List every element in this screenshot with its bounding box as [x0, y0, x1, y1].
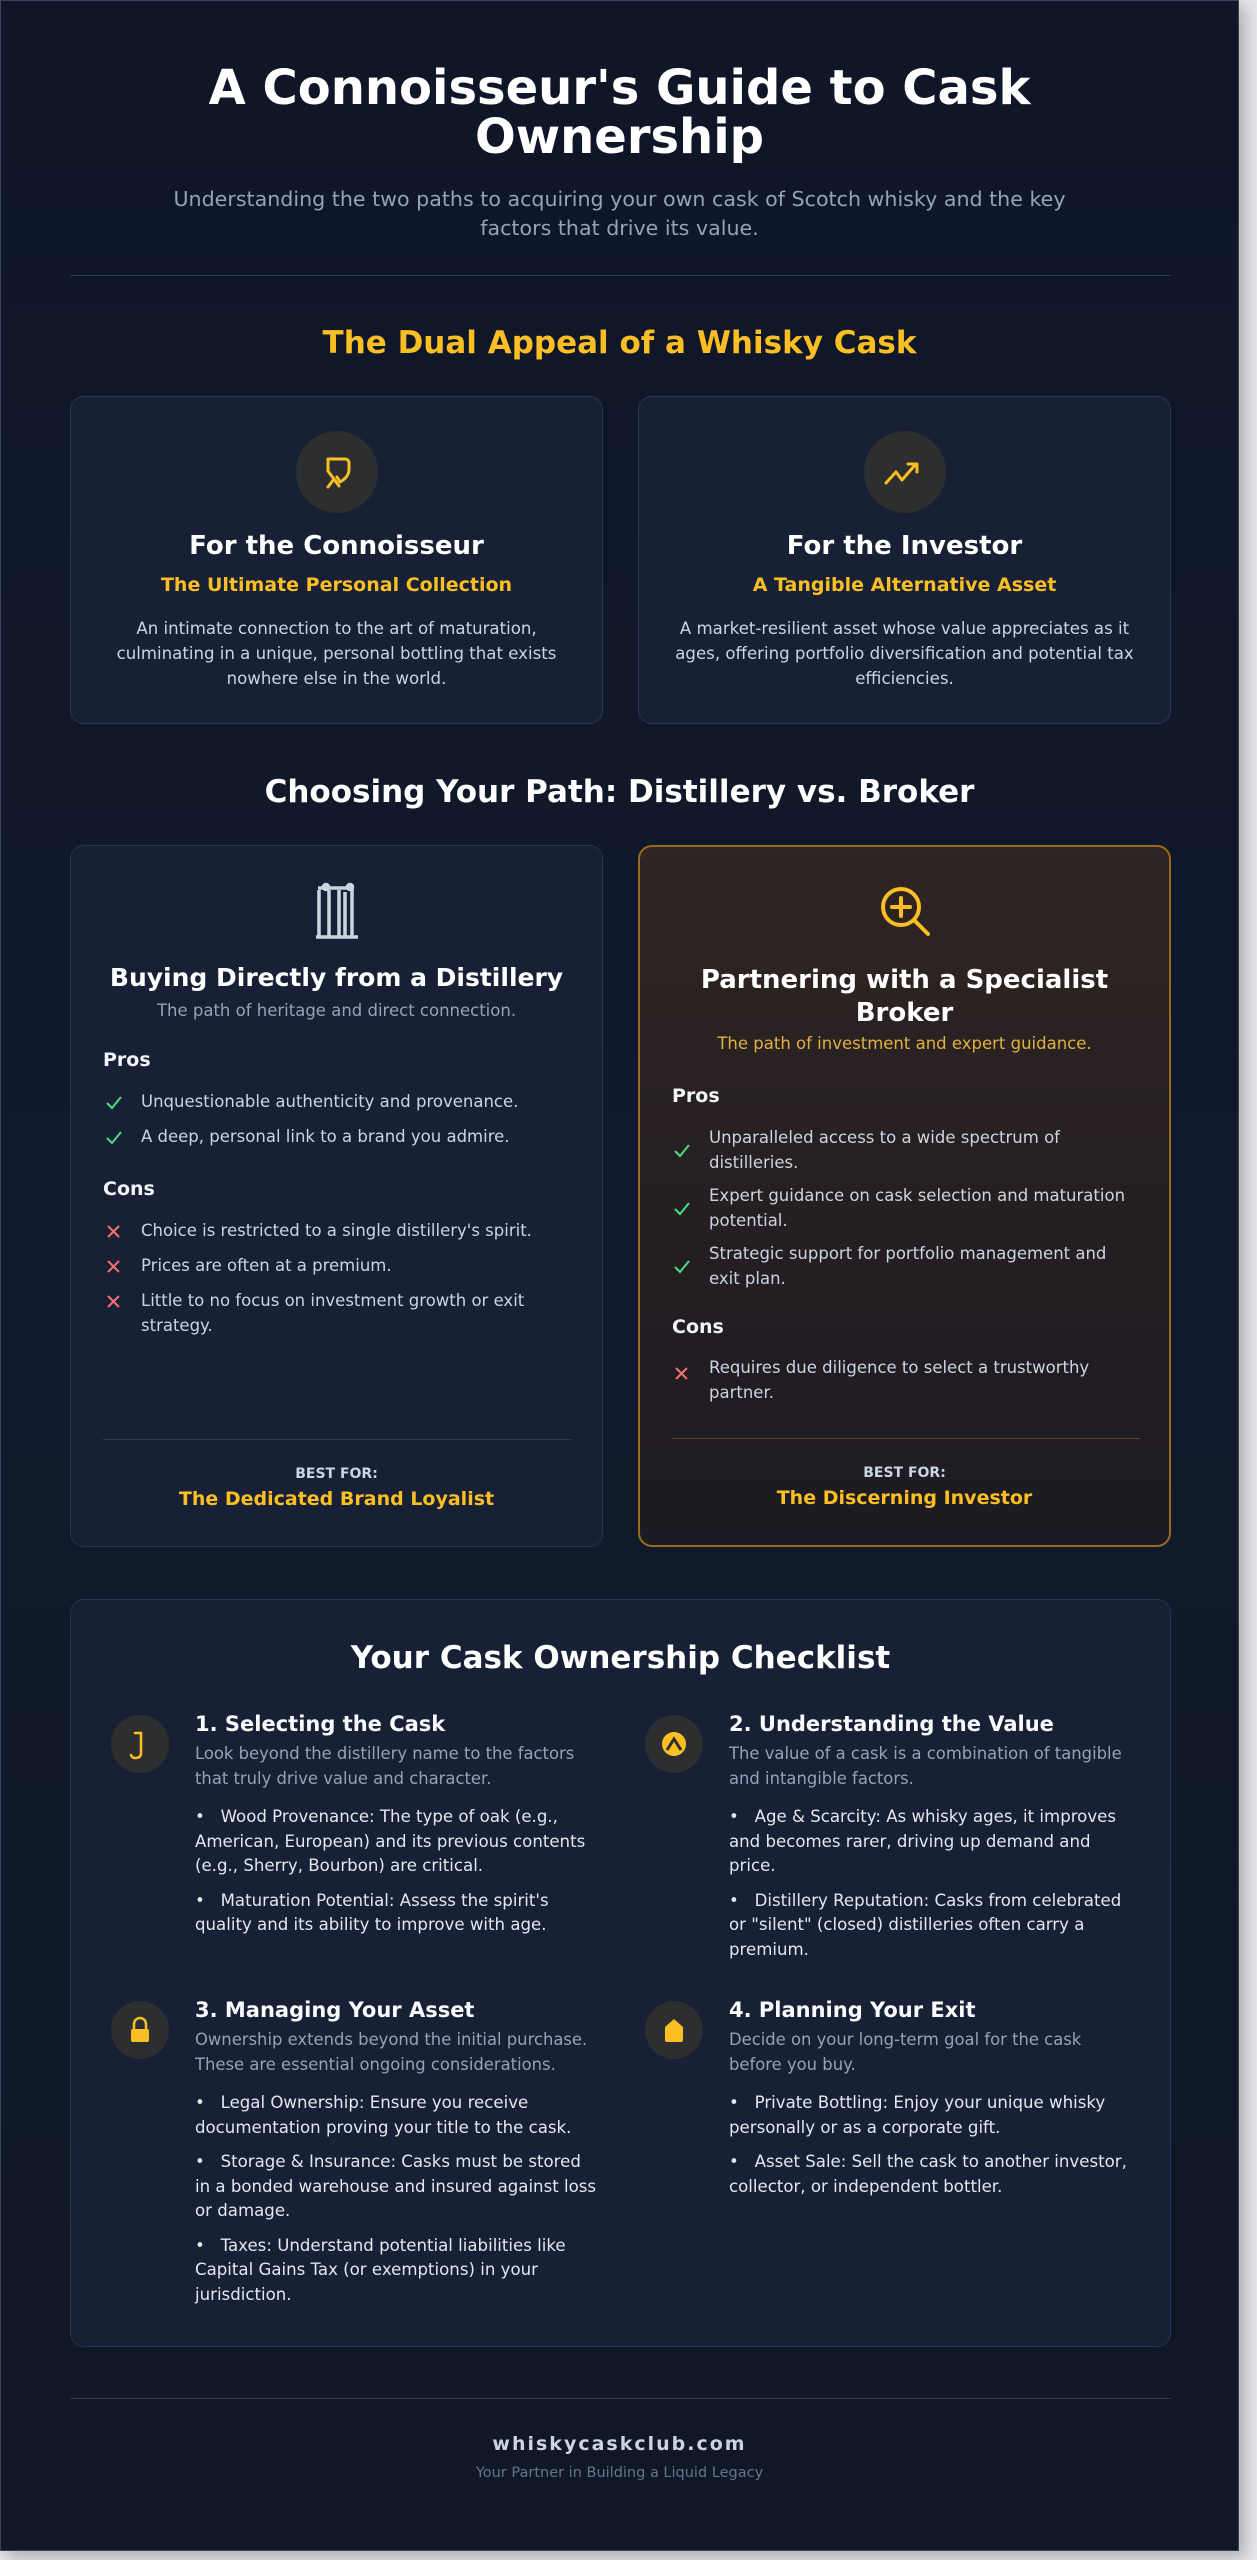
cons list — [675, 1358, 1089, 1402]
item 3: These are essential ongoing considerations. — [195, 2055, 556, 2074]
card title: For the Connoisseur — [189, 531, 484, 561]
pros list: exit plan. — [709, 1269, 786, 1288]
item 1: • Wood Provenance: The type of oak (e.g., — [195, 1807, 558, 1826]
heading: choosing path: Choosing Your Path: Distillery vs. Broker — [265, 774, 974, 810]
item 1: American, European) and its previous contents — [195, 1832, 585, 1850]
best for: The Dedicated Brand Loyalist — [179, 1488, 494, 1510]
card description — [675, 619, 1134, 688]
best for — [776, 1465, 1032, 1509]
card description: An intimate connection to the art of maturation, — [136, 619, 537, 638]
pros heading: Pros — [103, 1049, 151, 1071]
item 1: 1. Selecting the Cask — [195, 1712, 445, 1736]
item 2: price. — [729, 1856, 776, 1875]
item 3: 3. Managing Your Asset — [195, 1998, 474, 2022]
item 3: Capital Gains Tax (or exemptions) in your — [195, 2260, 538, 2279]
cons list: Little to no focus on investment growth or exit — [141, 1291, 524, 1310]
panel: broker — [638, 845, 1171, 1547]
item 4: • Asset Sale: Sell the cask to another investor, — [729, 2152, 1127, 2171]
icon: value — [645, 1715, 703, 1773]
item 2: • Distillery Reputation: Casks from celebrated — [729, 1890, 1121, 1910]
cons list: Requires due diligence to select a trustworthy — [709, 1358, 1089, 1377]
item 1: • Maturation Potential: Assess the spirit's — [195, 1890, 549, 1910]
pros list: Unquestionable authenticity and provenance. — [141, 1092, 518, 1111]
item 2: and becomes rarer, driving up demand and — [729, 1832, 1090, 1850]
pros list: distilleries. — [709, 1153, 798, 1172]
icon: hook — [111, 1715, 169, 1773]
item 1: Look beyond the distillery name to the factors — [195, 1744, 574, 1763]
item 4: • Private Bottling: Enjoy your unique whisky — [729, 2093, 1105, 2112]
item 1 — [111, 1712, 585, 1934]
footer: whiskycaskclub.com — [492, 2433, 747, 2455]
icon: connoisseur — [296, 431, 378, 513]
item 3: • Legal Ownership: Ensure you receive — [195, 2093, 528, 2112]
item 4: collector, or independent bottler. — [729, 2176, 1002, 2196]
card description: nowhere else in the world. — [227, 669, 446, 688]
cons list — [107, 1221, 532, 1335]
icon: magnifier — [881, 887, 930, 936]
title — [208, 60, 1032, 165]
item 3: jurisdiction. — [195, 2284, 292, 2304]
item 4: before you buy. — [729, 2055, 856, 2074]
footer: Your Partner in Building a Liquid Legacy — [476, 2465, 763, 2481]
item 1: quality and its ability to improve with age. — [195, 1915, 547, 1934]
footer — [476, 2433, 763, 2481]
item 3: Ownership extends beyond the initial purchase. — [195, 2030, 587, 2049]
pros list: Unparalleled access to a wide spectrum of — [709, 1128, 1060, 1147]
subtitle: The path of heritage and direct connection. — [157, 1001, 516, 1020]
card description: ages, offering portfolio diversification and potential tax — [675, 644, 1134, 663]
item 2: premium. — [729, 1940, 809, 1958]
icon: trend up — [864, 431, 946, 513]
pros list: A deep, personal link to a brand you admire. — [141, 1127, 510, 1146]
item 2: The value of a cask is a combination of tangible — [729, 1744, 1122, 1763]
card title: For the Investor — [787, 531, 1022, 561]
cons list: partner. — [709, 1383, 774, 1402]
panel: connoisseur — [70, 396, 603, 724]
title: Buying Directly from a Distillery — [110, 963, 563, 992]
item 4 — [645, 1998, 1127, 2196]
item 3: • Storage & Insurance: Casks must be stored — [195, 2152, 581, 2171]
cons list: strategy. — [141, 1316, 213, 1335]
subtitle: Understanding the two paths to acquiring your own cask of Scotch whisky and the key — [173, 187, 1066, 211]
card description: culminating in a unique, personal bottling that exists — [117, 644, 556, 663]
item 2: and intangible factors. — [729, 1769, 914, 1788]
checklist title: Your Cask Ownership Checklist — [351, 1640, 890, 1676]
best for: The Discerning Investor — [777, 1487, 1032, 1509]
item 3: documentation proving your title to the cask. — [195, 2118, 571, 2136]
best for: BEST FOR: — [295, 1466, 378, 1482]
cons list: Prices are often at a premium. — [141, 1256, 392, 1275]
item 1: (e.g., Sherry, Bourbon) are critical. — [195, 1856, 483, 1875]
icon: distillery — [316, 882, 358, 939]
item 1: that truly drive value and character. — [195, 1769, 491, 1788]
pros list — [674, 1128, 1125, 1288]
subtitle: The path of investment and expert guidance. — [717, 1034, 1092, 1053]
item 4: personally or as a corporate gift. — [729, 2118, 1000, 2136]
panel: checklist — [70, 1599, 1171, 2347]
card description — [117, 619, 556, 688]
item 3: or damage. — [195, 2201, 290, 2220]
card subtitle: The Ultimate Personal Collection — [161, 574, 512, 596]
pros list: Expert guidance on cask selection and maturation — [709, 1186, 1125, 1205]
item 4: 4. Planning Your Exit — [729, 1998, 976, 2022]
cons heading: Cons — [672, 1316, 724, 1338]
best for: BEST FOR: — [863, 1465, 946, 1481]
pros heading: Pros — [672, 1085, 720, 1107]
title: A Connoisseur's Guide to Cask — [209, 60, 1030, 116]
icon: exit — [645, 2001, 703, 2059]
subtitle: factors that drive its value. — [480, 216, 759, 240]
pros list: Strategic support for portfolio management and — [709, 1244, 1106, 1263]
item 2 — [645, 1712, 1122, 1958]
cons heading: Cons — [103, 1178, 155, 1200]
card description: A market-resilient asset whose value appreciates as it — [680, 619, 1129, 638]
title: Partnering with a Specialist — [701, 965, 1108, 995]
pros list — [106, 1092, 518, 1146]
icon: lock — [111, 2001, 169, 2059]
title: Ownership — [475, 109, 764, 165]
panel: investor — [638, 396, 1171, 724]
item 2: 2. Understanding the Value — [729, 1712, 1054, 1736]
item 2: or "silent" (closed) distilleries often carry a — [729, 1915, 1084, 1934]
panel: distillery — [70, 845, 603, 1547]
heading: dual appeal: The Dual Appeal of a Whisky Cask — [323, 325, 916, 361]
card subtitle: A Tangible Alternative Asset — [753, 574, 1056, 596]
item 3 — [111, 1998, 596, 2304]
item 2: • Age & Scarcity: As whisky ages, it improves — [729, 1807, 1116, 1826]
title: Broker — [856, 998, 953, 1028]
card description: efficiencies. — [855, 669, 954, 688]
item 3: • Taxes: Understand potential liabilities like — [195, 2236, 566, 2254]
cons list: Choice is restricted to a single distillery's spirit. — [141, 1221, 532, 1240]
item 4: Decide on your long-term goal for the cask — [729, 2030, 1081, 2049]
item 3: in a bonded warehouse and insured against loss — [195, 2176, 596, 2196]
pros list: potential. — [709, 1211, 788, 1230]
title — [701, 965, 1108, 1028]
subtitle — [173, 187, 1066, 240]
best for — [178, 1466, 494, 1510]
